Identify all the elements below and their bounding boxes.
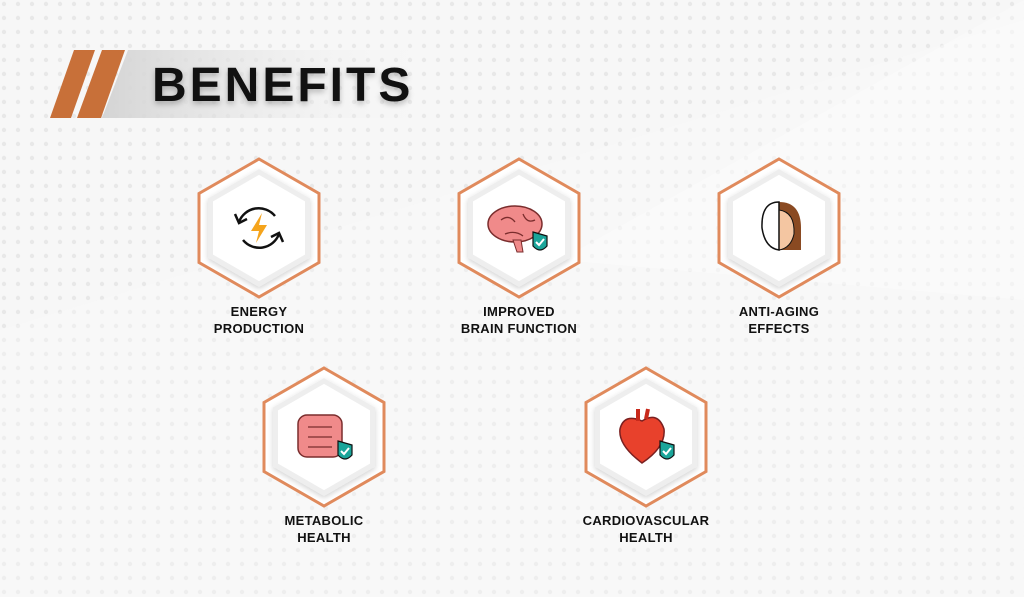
icon: heart [584,366,708,508]
panel: metabolic [262,366,386,545]
panel: energy production: PRODUCTION [214,321,304,336]
panel: metabolic: METABOLIC [284,513,364,528]
panel: energy production: ENERGY [231,304,287,319]
panel: energy production [198,157,320,336]
panel: anti-aging: ANTI-AGING [739,304,819,319]
icon: face [718,157,840,299]
panel: cardiovascular: CARDIOVASCULAR [583,513,709,528]
title: BENEFITS [152,59,413,112]
panel: cardiovascular: HEALTH [619,530,673,545]
icon: energy [198,157,320,299]
panel: brain [458,157,580,336]
panel: anti-aging [718,157,840,336]
panel: brain: BRAIN FUNCTION [461,321,577,336]
icon: intestine [262,366,386,508]
panel: cardiovascular [583,366,709,545]
panel: brain: IMPROVED [483,304,555,319]
panel: anti-aging: EFFECTS [748,321,810,336]
panel: metabolic: HEALTH [297,530,351,545]
icon: brain [458,157,580,299]
title [50,50,413,118]
